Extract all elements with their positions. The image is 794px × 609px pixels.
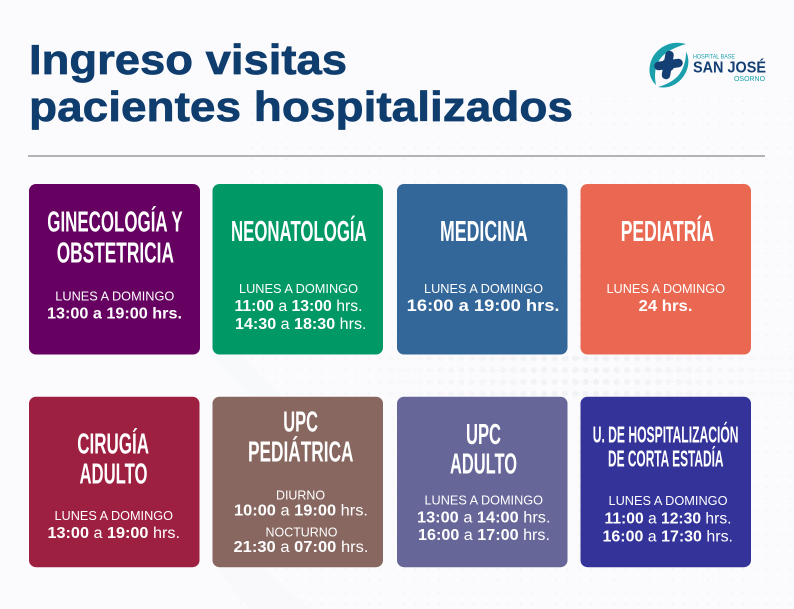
panel: UPC Pediátrica: 21:30 a 07:00 hrs. [234, 539, 368, 556]
panel: Ginecología y Obstetricia: GINECOLOGÍA Y [47, 205, 183, 239]
panel: Ginecología y Obstetricia: OBSTETRICIA [57, 237, 174, 269]
panel: UPC Adulto: 13:00 a 14:00 hrs. [417, 510, 550, 527]
panel: U. de Hospitalización de Corta Estadía [580, 397, 751, 567]
panel: Cirugía Adulto: CIRUGÍA [77, 426, 149, 460]
panel: Neonatología: LUNES A DOMINGO [239, 282, 358, 296]
panel: UPC Adulto [397, 397, 568, 567]
panel: Neonatología: 11:00 a 13:00 hrs. [234, 298, 362, 315]
panel: UPC Pediátrica: PEDIÁTRICA [248, 435, 354, 469]
logo text: OSORNO [734, 76, 766, 83]
panel: UPC Pediátrica: DIURNO [276, 488, 325, 502]
panel: U. de Hospitalización de Corta Estadía: LUNES A DOMINGO [608, 494, 728, 508]
panel: UPC Pediátrica [212, 397, 383, 567]
panel: UPC Adulto: LUNES A DOMINGO [424, 494, 543, 508]
panel: Cirugía Adulto: ADULTO [80, 458, 148, 490]
panel: U. de Hospitalización de Corta Estadía: 16:00 a 17:30 hrs. [602, 528, 733, 545]
panel: Cirugía Adulto: LUNES A DOMINGO [54, 509, 173, 523]
panel: Pediatría [580, 184, 751, 354]
panel: Cirugía Adulto: 13:00 a 19:00 hrs. [48, 525, 180, 542]
panel: Pediatría: PEDIATRÍA [621, 214, 714, 248]
logo text [693, 54, 766, 83]
logo text: HOSPITAL BASE [693, 54, 736, 60]
panel: Medicina [397, 184, 568, 354]
panel: Cirugía Adulto [29, 397, 200, 567]
panel: Ginecología y Obstetricia: 13:00 a 19:00 hrs. [47, 305, 182, 322]
panel: UPC Pediátrica: 10:00 a 19:00 hrs. [234, 502, 368, 519]
title [29, 36, 573, 130]
panel: Medicina: LUNES A DOMINGO [424, 282, 543, 296]
logo text: SAN JOSÉ [693, 60, 766, 76]
panel: UPC Adulto: UPC [466, 419, 501, 451]
panel: Neonatología: 14:30 a 18:30 hrs. [235, 316, 366, 333]
panel: Ginecología y Obstetricia: LUNES A DOMINGO [55, 290, 175, 304]
icon: logo eye and cross [649, 43, 688, 88]
panel: Neonatología [212, 184, 383, 354]
title: Ingreso visitas [29, 36, 347, 83]
panel: Pediatría: 24 hrs. [638, 298, 692, 315]
panel: Neonatología: NEONATOLOGÍA [231, 214, 367, 248]
panel: UPC Adulto: ADULTO [450, 448, 517, 480]
panel: Ginecología y Obstetricia [29, 184, 200, 354]
panel: UPC Pediátrica: UPC [283, 407, 318, 439]
panel: UPC Pediátrica: NOCTURNO [266, 525, 338, 539]
panel: Medicina: MEDICINA [440, 216, 528, 248]
panel: UPC Adulto: 16:00 a 17:00 hrs. [418, 527, 550, 544]
panel: U. de Hospitalización de Corta Estadía: 11:00 a 12:30 hrs. [604, 510, 732, 527]
logo: Hospital Base San José Osorno [649, 43, 766, 88]
panel: Medicina: 16:00 a 19:00 hrs. [407, 296, 560, 315]
title: pacientes hospitalizados [29, 83, 573, 130]
panel: Pediatría: LUNES A DOMINGO [606, 282, 725, 296]
